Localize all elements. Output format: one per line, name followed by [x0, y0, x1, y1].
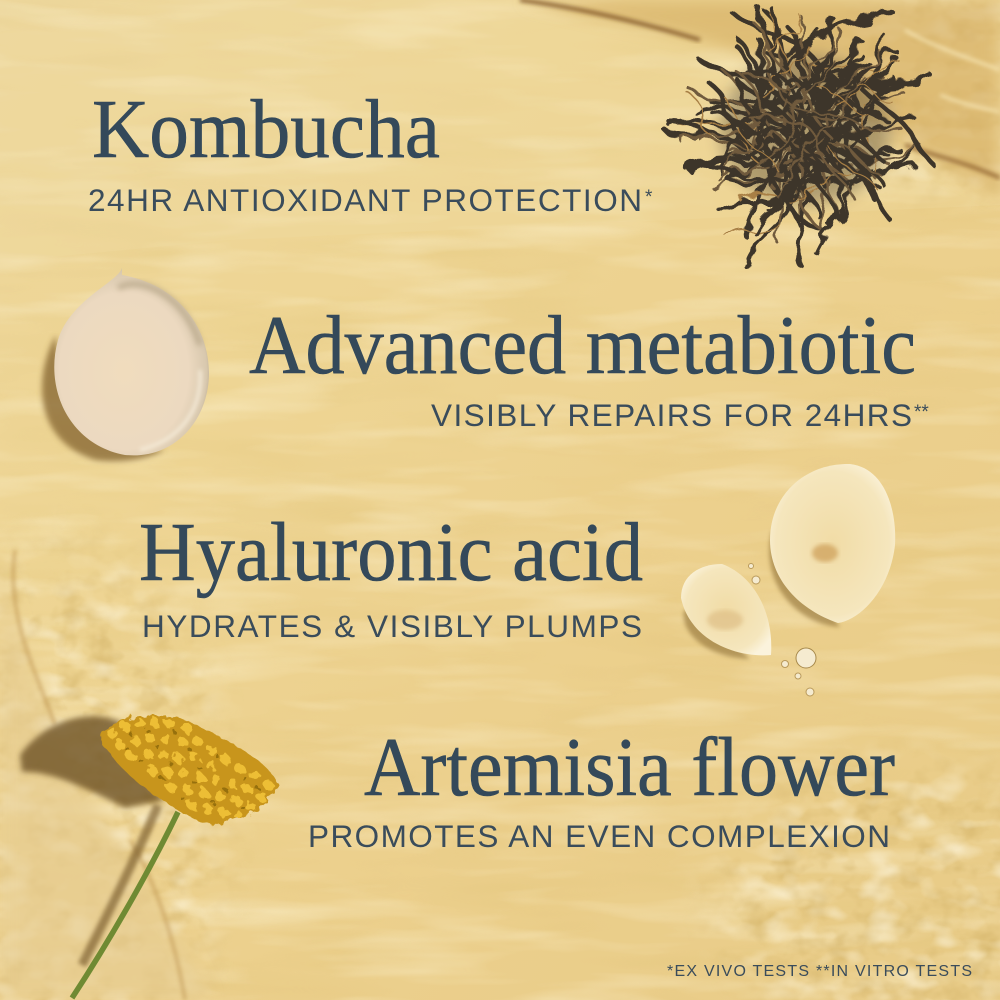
footnote mark: * — [645, 187, 653, 208]
icon: serum droplets — [681, 464, 895, 696]
footnote mark: ** — [914, 402, 929, 423]
heading: Artemisia flower: Artemisia flower — [364, 721, 895, 814]
subheading: promotes an even complexion: PROMOTES AN EVEN COMPLEXION — [308, 818, 890, 854]
subheading: hydrates and visibly plumps: HYDRATES & VISIBLY PLUMPS — [142, 608, 642, 644]
icon: artemisia flower — [20, 716, 278, 998]
small droplet — [681, 564, 771, 655]
footnote: *EX VIVO TESTS **IN VITRO TESTS — [667, 963, 972, 980]
large droplet — [770, 464, 895, 623]
heading: Hyaluronic acid: Hyaluronic acid — [139, 506, 643, 599]
heading: Advanced metabiotic: Advanced metabiotic — [249, 299, 916, 392]
subheading: 24hr antioxidant protection: 24HR ANTIOXIDANT PROTECTION — [88, 182, 642, 218]
icon: clear gel droplet — [42, 268, 209, 461]
subheading: visibly repairs for 24hrs: VISIBLY REPAIRS FOR 24HRS — [431, 397, 912, 433]
icon: tea leaves pile — [644, 0, 962, 281]
heading: Kombucha: Kombucha — [92, 83, 440, 176]
